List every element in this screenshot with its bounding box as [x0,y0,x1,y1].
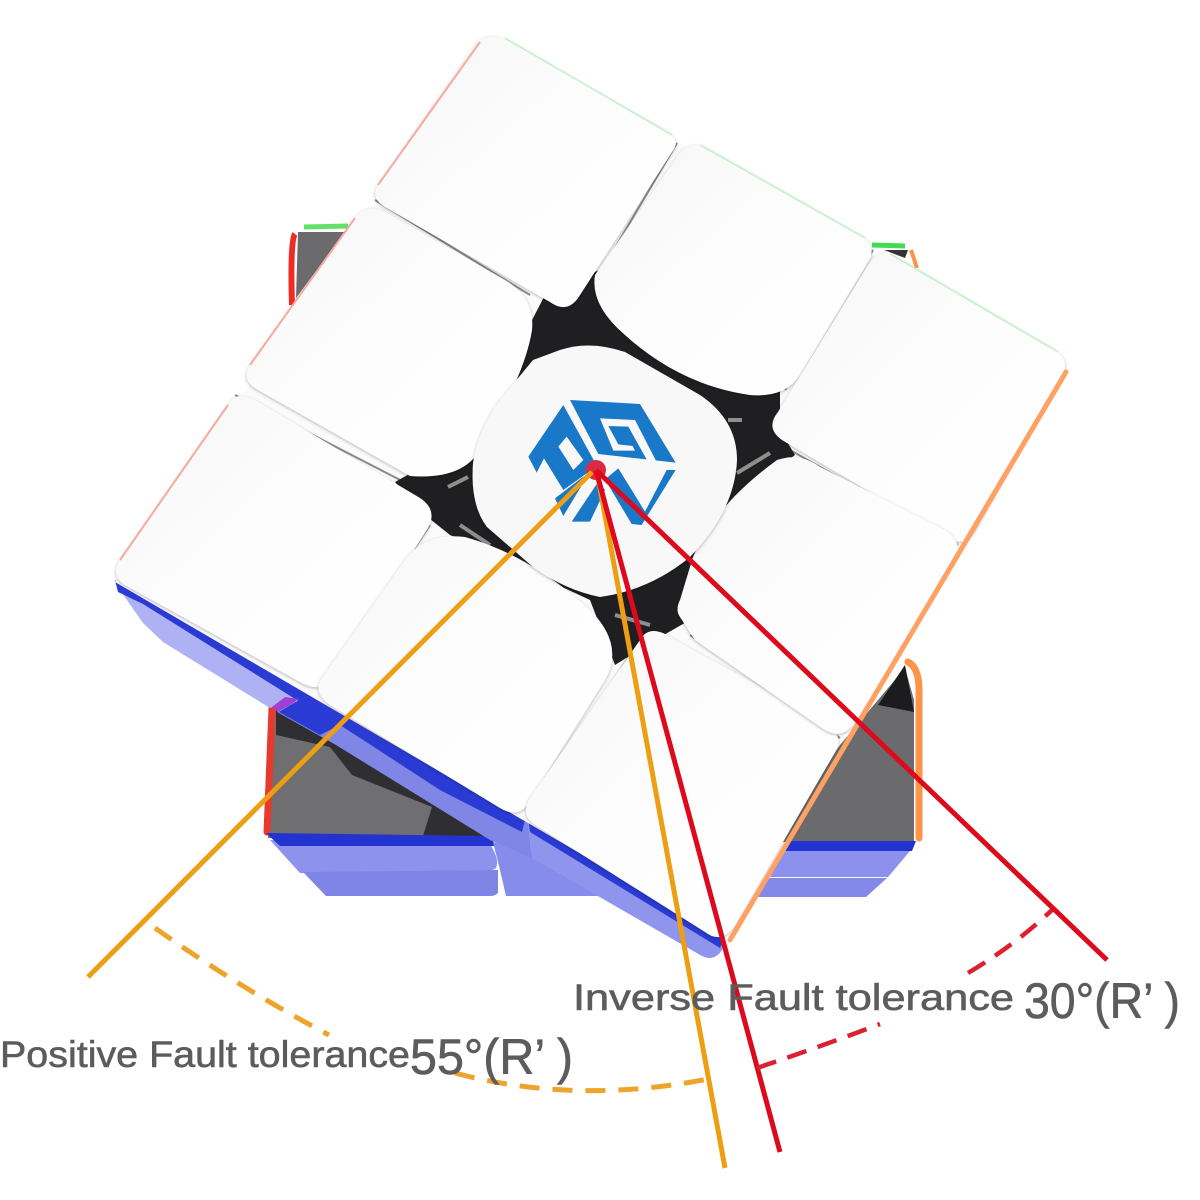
tile: bottom middle [318,536,612,812]
tile: middle left [246,209,532,476]
value: 30 degrees: 30°(R’ ) [1024,973,1180,1029]
red dashed arc [757,910,1052,1068]
label: positive fault tolerance: Positive Fault tolerance [0,1034,410,1075]
lower blue band right [770,851,910,877]
lower layer left shadow [276,705,500,838]
red left edge [120,42,480,560]
lower blue centre pieces [493,842,600,896]
central mechanism [395,265,795,665]
lower dark blue rim left [266,833,496,846]
mechanism highlights [448,420,770,625]
orange limit lines [88,472,725,1168]
tile: top middle [594,145,872,395]
logo: A block [528,405,594,490]
lower blue band right second row [755,878,887,897]
green top edge [505,38,1058,352]
bottom light blue side [527,812,725,958]
orange right edge [730,372,1066,940]
centre tile [473,345,737,597]
purple corner accent [272,697,299,713]
orange dashed arc [155,928,708,1091]
tile: middle right [678,457,958,734]
logo: GAN blue mark [528,400,676,525]
tile: top corner [375,36,676,307]
logo: G white spiral [600,418,657,462]
tile: right corner [772,253,1065,542]
lower layer right dark corner [878,665,914,712]
top layer face base [115,35,1065,938]
left light blue side [115,583,318,708]
middle side strip [277,692,532,858]
lower layer orange edge [908,662,919,838]
tile: left corner [116,396,432,687]
lower layer left gray face [268,708,500,838]
lower dark blue rim right [782,841,916,851]
back corner top left [291,226,348,305]
lower layer red edge [267,708,272,832]
bottom dark blue rim [527,812,725,948]
gaps between tiles [235,143,958,810]
red limit lines [596,470,1107,1152]
middle dark blue rim [279,692,527,832]
left dark blue rim [115,580,320,702]
pivot dot [586,460,606,480]
tile: bottom corner [526,631,838,937]
top layer of cube [115,35,1066,958]
logo: G block [570,400,676,463]
back corner top right [872,245,917,268]
lower cube layer [266,226,919,897]
label: inverse fault tolerance: Inverse Fault tolerance [573,977,1014,1018]
logo: N strokes [555,468,676,525]
lower blue band left [270,840,497,873]
value: 55 degrees: 55°(R’ ) [410,1029,573,1085]
lower blue band left second row [303,870,498,896]
lower layer right gray face [770,668,914,842]
